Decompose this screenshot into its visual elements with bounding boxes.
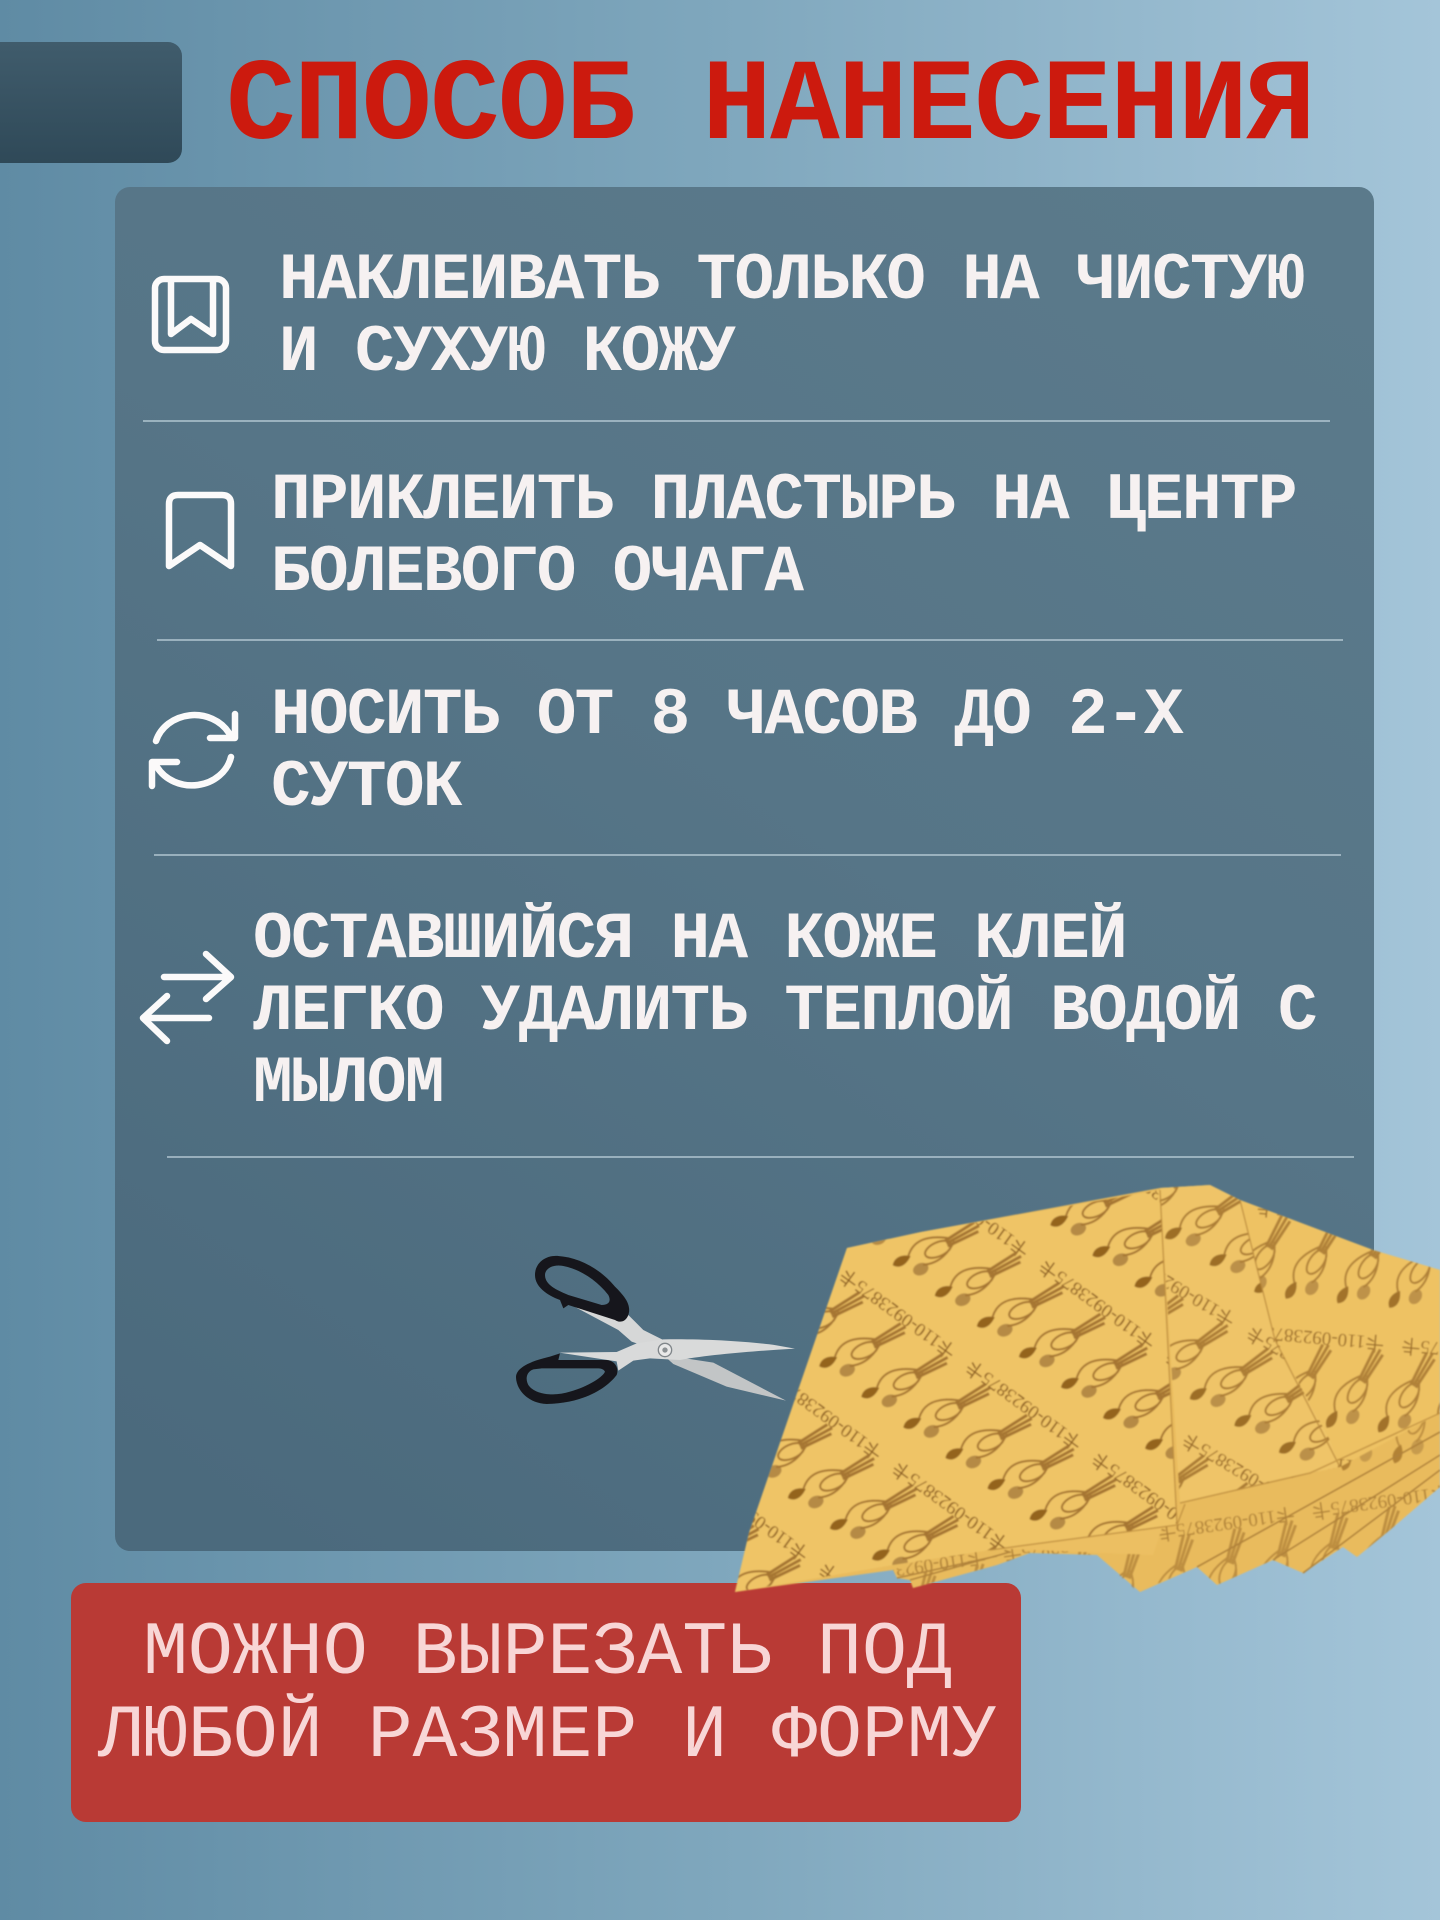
step 2 text: БОЛЕВОГО ОЧАГА	[271, 535, 804, 610]
step 2 text	[271, 463, 1296, 610]
icon: swap arrows	[143, 954, 231, 1041]
dark header tab	[0, 42, 182, 163]
step 3 text	[271, 678, 1184, 825]
title: СПОСОБ НАНЕСЕНИЯ	[226, 41, 1314, 173]
step 1	[155, 243, 1304, 390]
icon: bookmark in square	[155, 279, 226, 350]
step 3 text: СУТОК	[271, 750, 463, 825]
illustration: patch sheets	[735, 1185, 1440, 1592]
icon: bookmark	[169, 495, 231, 566]
red callout box	[71, 1583, 1021, 1822]
step 4 text: ЛЕГКО УДАЛИТЬ ТЕПЛОЙ ВОДОЙ С	[253, 973, 1316, 1049]
callout text: МОЖНО ВЫРЕЗАТЬ ПОД	[143, 1611, 952, 1696]
step 1 text	[279, 243, 1304, 390]
front sheet	[735, 1190, 1177, 1592]
step 1 text: И СУХУЮ КОЖУ	[279, 315, 737, 390]
under-front sheet	[990, 1520, 1162, 1555]
callout text	[97, 1611, 997, 1779]
icon: scissors	[516, 1256, 795, 1404]
step 4 text: ОСТАВШИЙСЯ НА КОЖЕ КЛЕЙ	[253, 901, 1126, 977]
step 4 text: МЫЛОМ	[253, 1046, 443, 1121]
panel: instructions	[115, 187, 1374, 1551]
step 3	[152, 678, 1184, 825]
lower fan sheets	[893, 1400, 1440, 1592]
step 1 text: НАКЛЕИВАТЬ ТОЛЬКО НА ЧИСТУЮ	[279, 243, 1304, 318]
middle sheet	[1160, 1185, 1340, 1503]
right sheet	[1200, 1186, 1440, 1473]
step 2	[169, 463, 1296, 610]
backing sheet	[735, 1185, 1440, 1592]
step 3 text: НОСИТЬ ОТ 8 ЧАСОВ ДО 2-Х	[271, 678, 1184, 753]
step 2 text: ПРИКЛЕИТЬ ПЛАСТЫРЬ НА ЦЕНТР	[271, 463, 1296, 538]
icon: sync arrows	[152, 714, 235, 786]
step 4 text	[253, 901, 1316, 1121]
callout text: ЛЮБОЙ РАЗМЕР И ФОРМУ	[97, 1694, 997, 1779]
step 4	[143, 901, 1316, 1121]
